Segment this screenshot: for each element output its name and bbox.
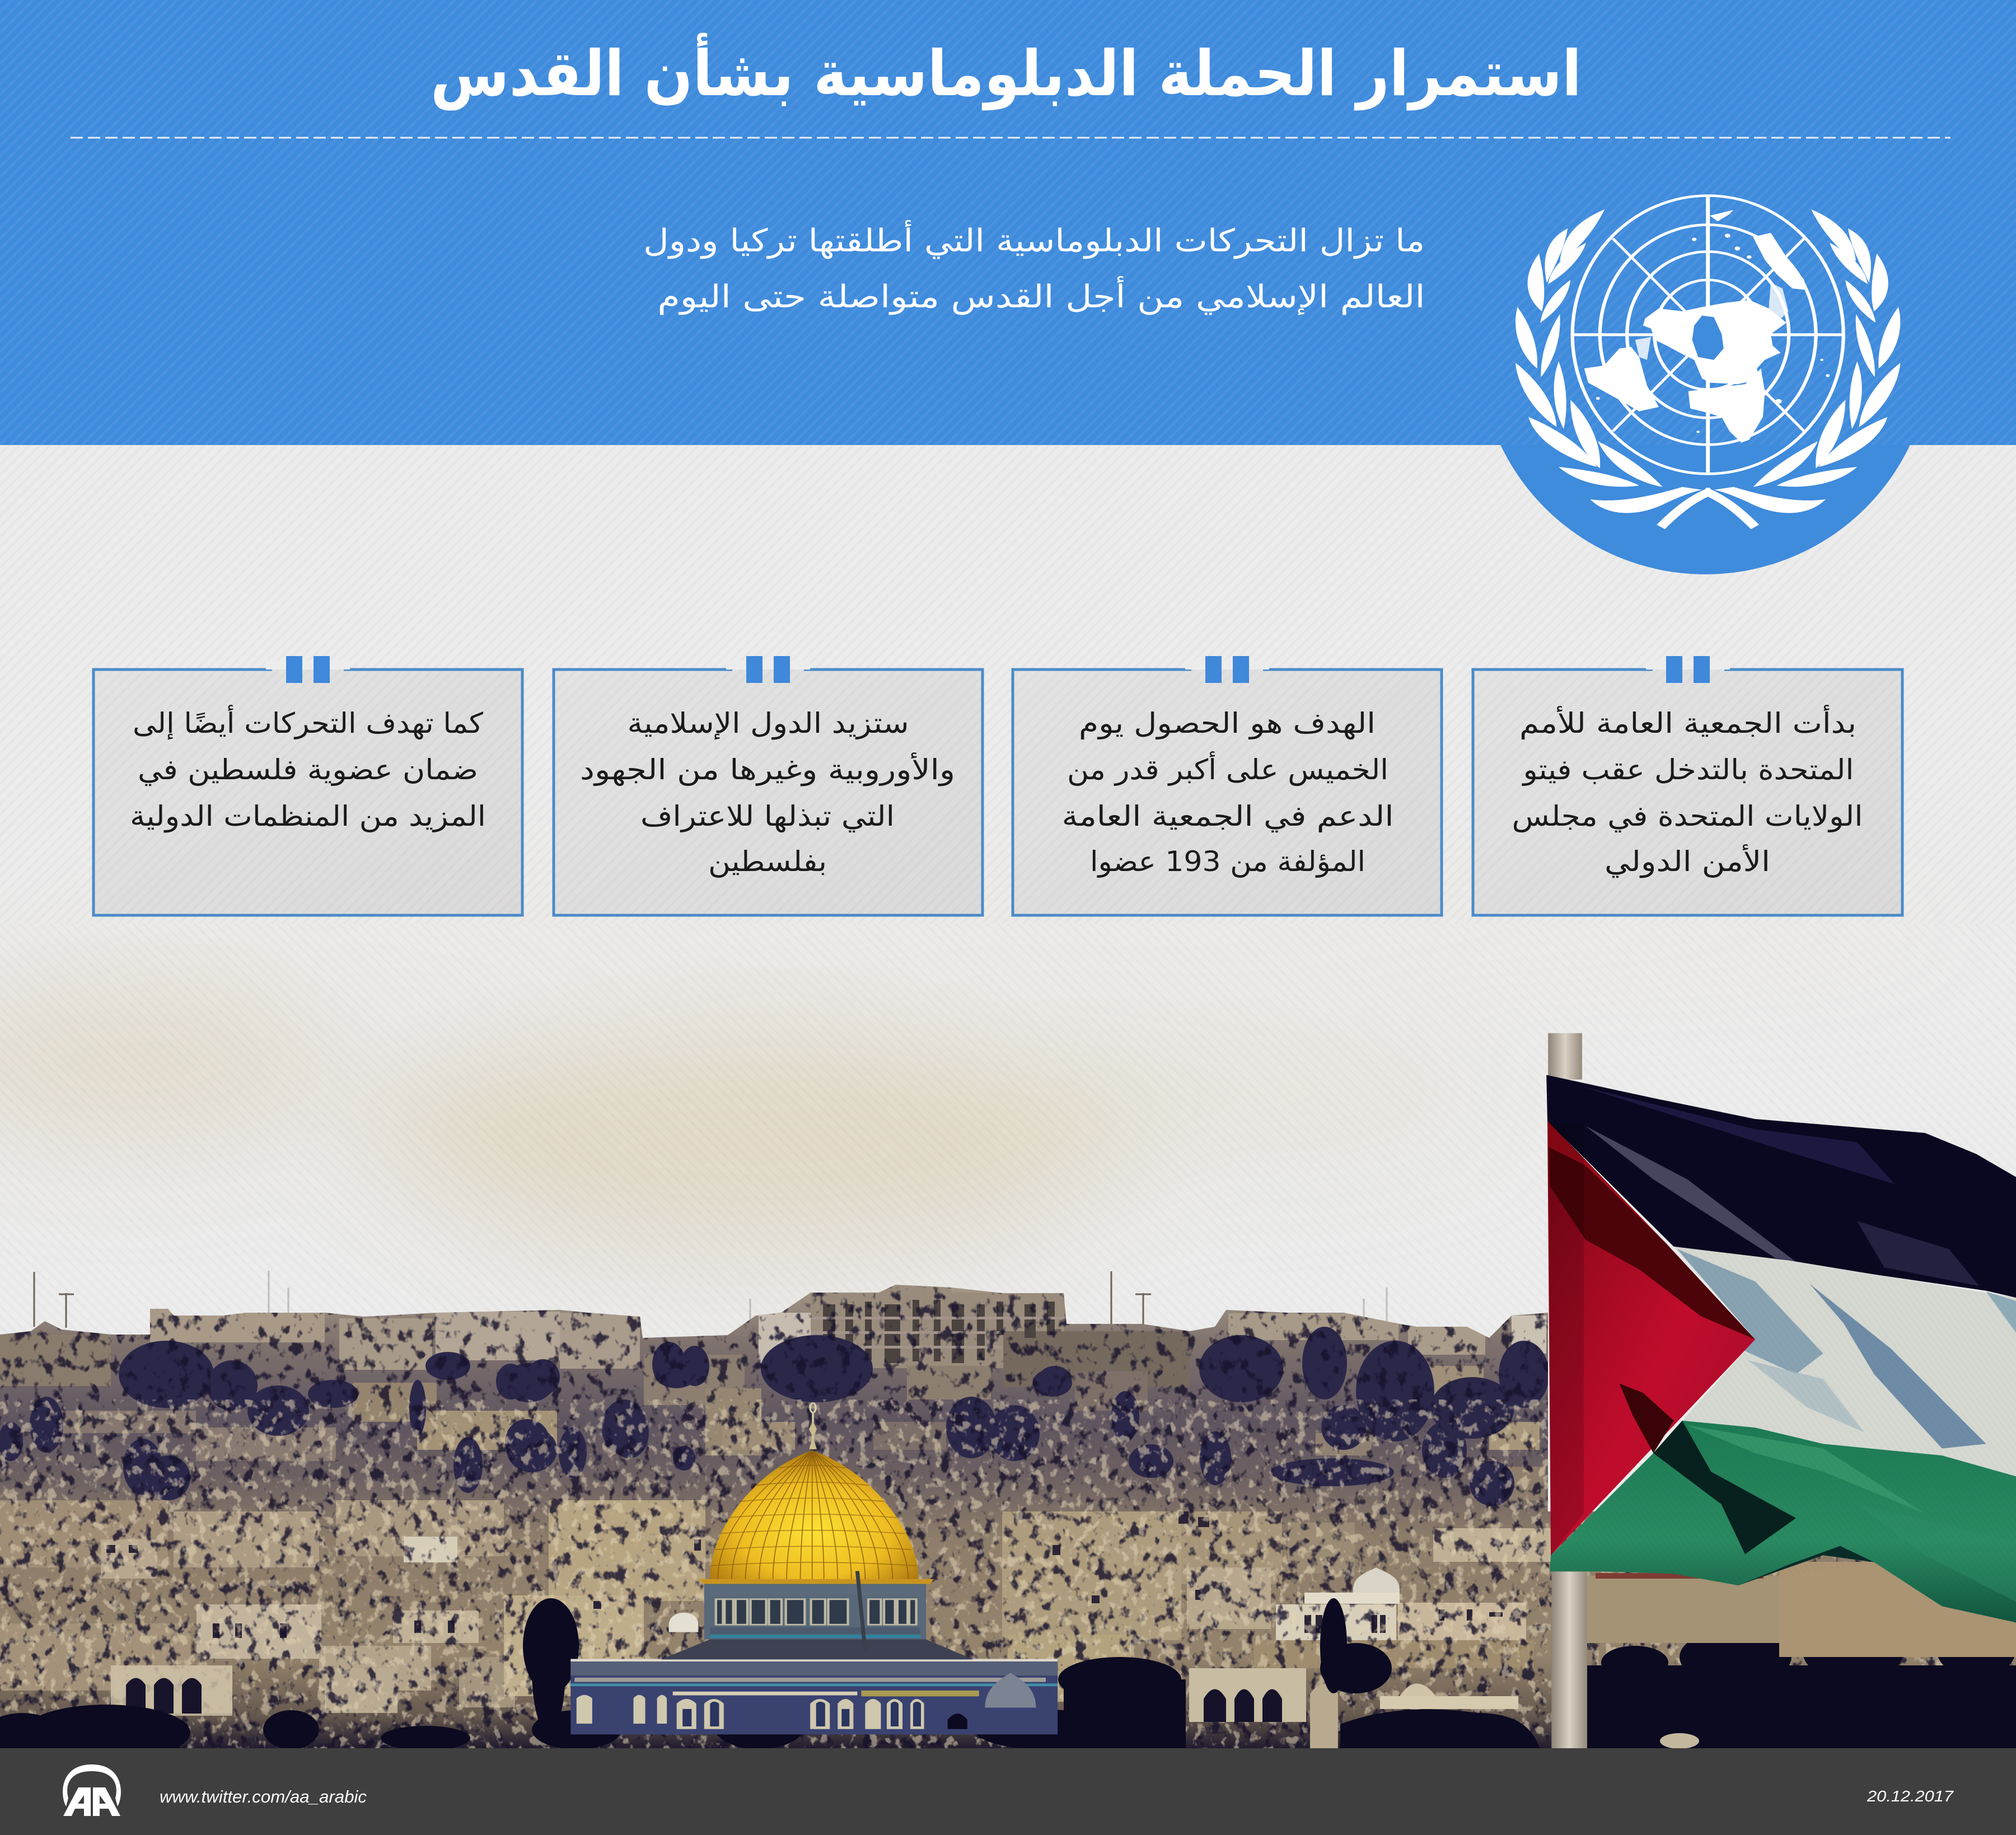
Dome of the Rock: [570, 1403, 1058, 1734]
panel: card 2: التي تبذلها للاعتراف: [640, 800, 895, 833]
panel: card 2: بفلسطين: [708, 845, 827, 878]
panorama of Jerusalem: [0, 1282, 2016, 1761]
panel: card 4: المتحدة بالتدخل عقب فيتو: [1521, 753, 1854, 786]
hazy sky clouds: [0, 890, 1959, 1271]
windows on lower buildings: [106, 1511, 1503, 1638]
panel: card 1: ضمان عضوية فلسطين في: [138, 753, 478, 786]
panel: card 4: [1472, 656, 1903, 916]
blue header band: [0, 0, 2016, 445]
twitter handle: www.twitter.com/aa_arabic: [160, 1787, 367, 1806]
emblem backing circle: [1479, 121, 1932, 574]
panel: card 2: والأوروبية وغيرها من الجهود: [580, 752, 955, 787]
green stripe: [1550, 1421, 2016, 1622]
pole bottom: [1551, 1571, 1587, 1748]
panel: card 2: [553, 656, 984, 916]
painterly texture: [0, 1282, 2016, 1748]
footer bar: [0, 1748, 2016, 1835]
Palestinian flag: [1546, 1075, 2016, 1622]
dome pole: [855, 1571, 867, 1651]
panel: card 3: [1012, 656, 1443, 916]
white stripe: [1674, 1247, 2016, 1476]
continents: [1584, 210, 1830, 443]
drum with tile panels: [704, 1582, 926, 1640]
foreground dark trees: [0, 1598, 2016, 1761]
panel: card 2: ستزيد الدول الإسلامية: [627, 707, 909, 740]
panel: card 3: الدعم في الجمعية العامة: [1061, 800, 1394, 832]
intro text: [643, 220, 1425, 315]
arctic ocean: [1692, 316, 1724, 360]
apartment tower windows: [823, 1300, 1055, 1363]
panel: card 1: كما تهدف التحركات أيضًا إلى: [133, 705, 483, 740]
finial ornaments: [809, 1421, 817, 1449]
white domed building: [1304, 1567, 1400, 1604]
panel: card 4: الولايات المتحدة في مجلس: [1512, 800, 1863, 832]
header stripe texture: [0, 0, 2016, 445]
sky stripe texture: [0, 924, 2016, 1483]
icon: AA logo: [63, 1764, 121, 1816]
date: 20.12.2017: [1867, 1787, 1954, 1805]
panel: card 4: بدأت الجمعية العامة للأمم: [1519, 705, 1856, 739]
intro text: ما تزال التحركات الدبلوماسية التي أطلقتها تركيا ودول: [643, 220, 1425, 259]
ribbon tails: [1660, 491, 1755, 527]
upper background stripes: [0, 445, 2016, 924]
panel: card 3: الخميس على أكبر قدر من: [1067, 751, 1388, 786]
finial: [810, 1403, 816, 1449]
antennas on the skyline: [34, 1271, 1387, 1332]
panel: card 1: [92, 656, 523, 916]
lower slope buildings: [0, 1467, 1551, 1714]
intro text: العالم الإسلامي من أجل القدس متواصلة حتى اليوم: [657, 276, 1425, 315]
title: استمرار الحملة الدبلوماسية بشأن القدس: [431, 33, 1582, 110]
dark cypress trees on the slope: [0, 1327, 1549, 1506]
red triangle: [1547, 1121, 1755, 1555]
flag pole: [1548, 1033, 1587, 1748]
buildings behind the flag: [1585, 1562, 2016, 1749]
dashed divider: [71, 137, 1950, 139]
golden dome: [698, 1450, 934, 1584]
small white dome: [669, 1613, 698, 1632]
panel: card 3: الهدف هو الحصول يوم: [1079, 707, 1376, 740]
black stripe: [1546, 1075, 2016, 1298]
flag stripe texture: [1550, 1247, 2016, 1622]
background buildings: [0, 1285, 1546, 1387]
foreground arcades: [111, 1665, 1518, 1748]
octagonal base: [570, 1659, 1058, 1734]
wreath right side: [1714, 209, 1900, 513]
pole top: [1548, 1033, 1582, 1079]
globe grid: [1573, 195, 1844, 474]
panel: card 4: الأمن الدولي: [1605, 844, 1770, 878]
panel: card 3: المؤلفة من 193 عضوا: [1090, 845, 1365, 878]
olive wreath: [1515, 209, 1702, 513]
panel: card 1: المزيد من المنظمات الدولية: [130, 800, 486, 833]
tiled roof: [661, 1640, 973, 1659]
city base tone: [0, 1282, 2016, 1748]
mid-slope buildings: [62, 1355, 1540, 1461]
icon: UN emblem: [1515, 195, 1900, 527]
